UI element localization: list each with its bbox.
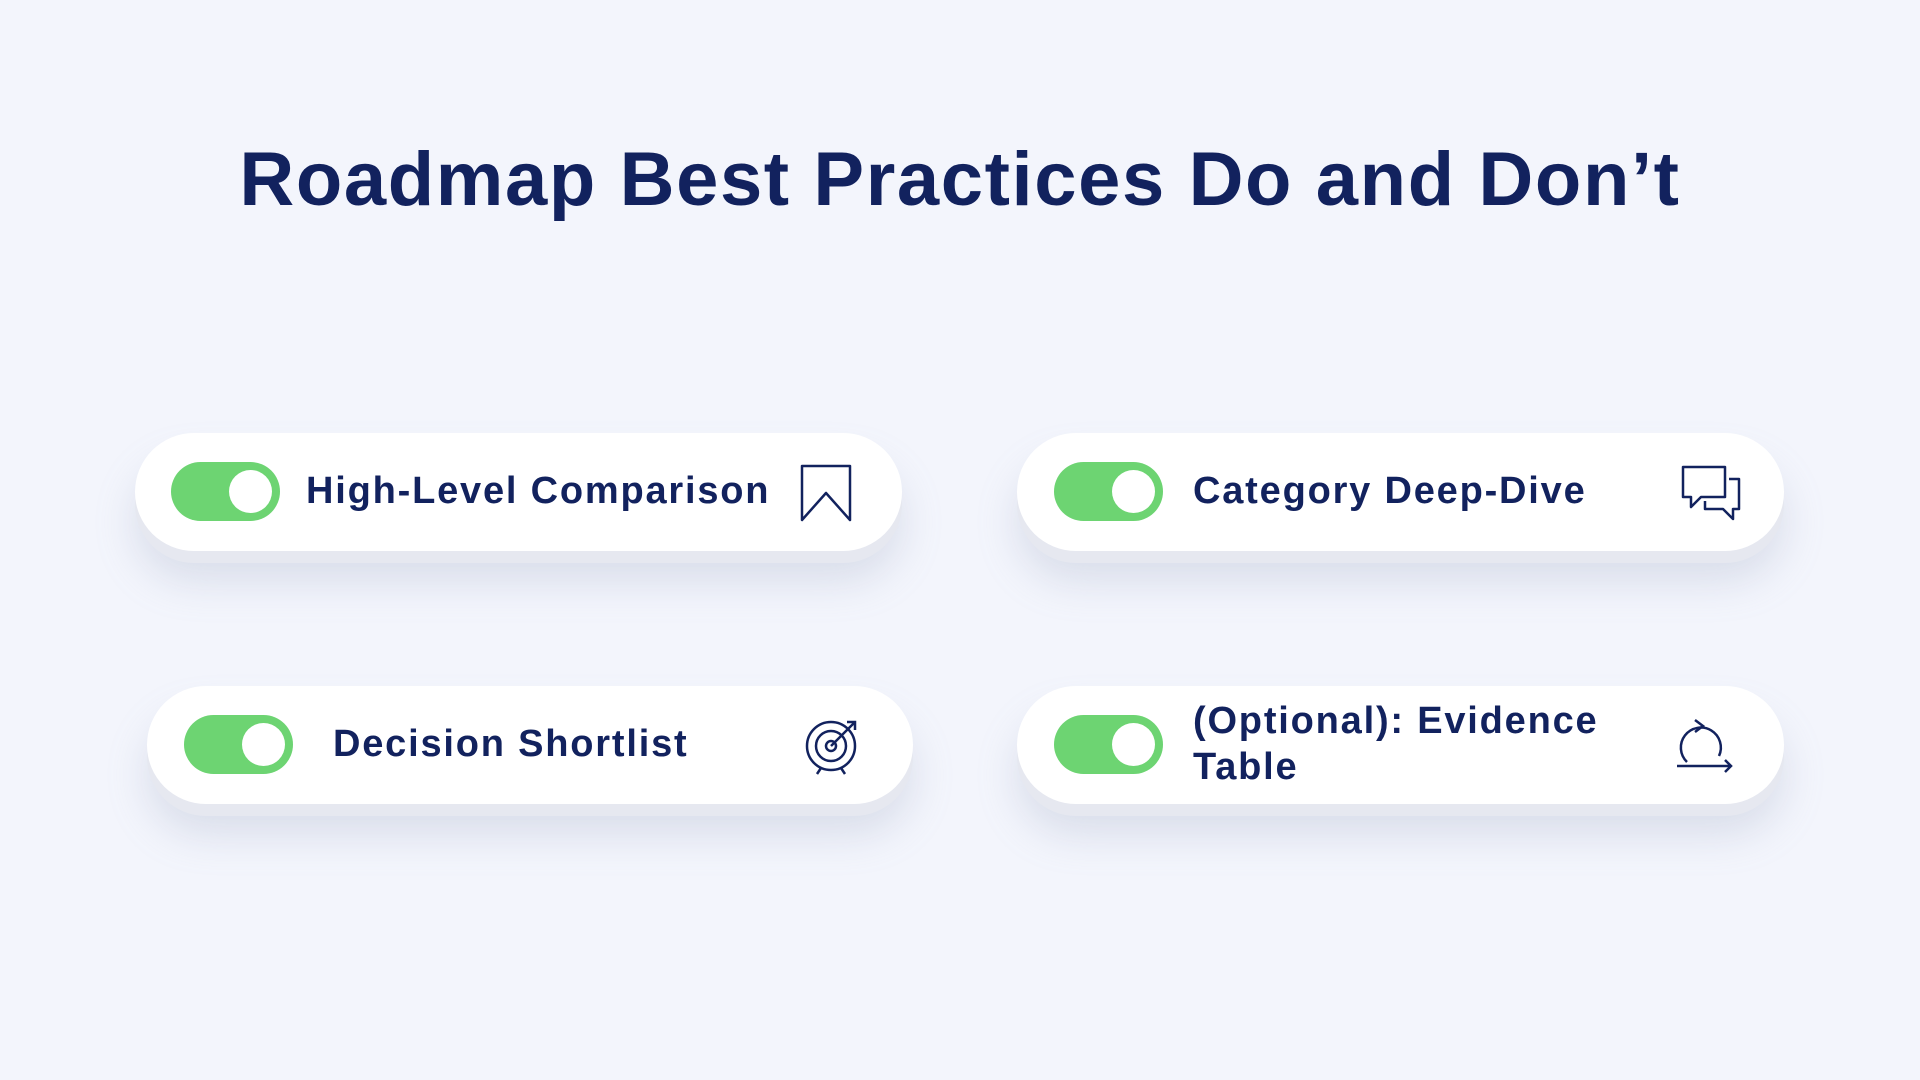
label: Category Deep-Dive xyxy=(1193,470,1587,512)
card: Decision Shortlist xyxy=(147,686,913,804)
title: Roadmap Best Practices Do and Don’t xyxy=(239,137,1681,222)
icon: cycle arrow xyxy=(1677,719,1733,773)
toggle xyxy=(171,462,280,521)
toggle xyxy=(1054,715,1163,774)
toggle xyxy=(1054,462,1163,521)
toggle xyxy=(184,715,293,774)
label: Decision Shortlist xyxy=(333,723,688,765)
icon: chat bubbles xyxy=(1682,466,1740,520)
label: High-Level Comparison xyxy=(306,470,770,512)
label: (Optional): Evidence xyxy=(1193,700,1598,742)
icon: bookmark xyxy=(800,464,852,522)
icon: target xyxy=(806,720,856,775)
card: Category Deep-Dive xyxy=(1017,433,1784,551)
label: Table xyxy=(1193,746,1298,788)
card: High-Level Comparison xyxy=(135,433,902,551)
card: Evidence Table xyxy=(1017,686,1784,804)
label xyxy=(1193,700,1598,788)
